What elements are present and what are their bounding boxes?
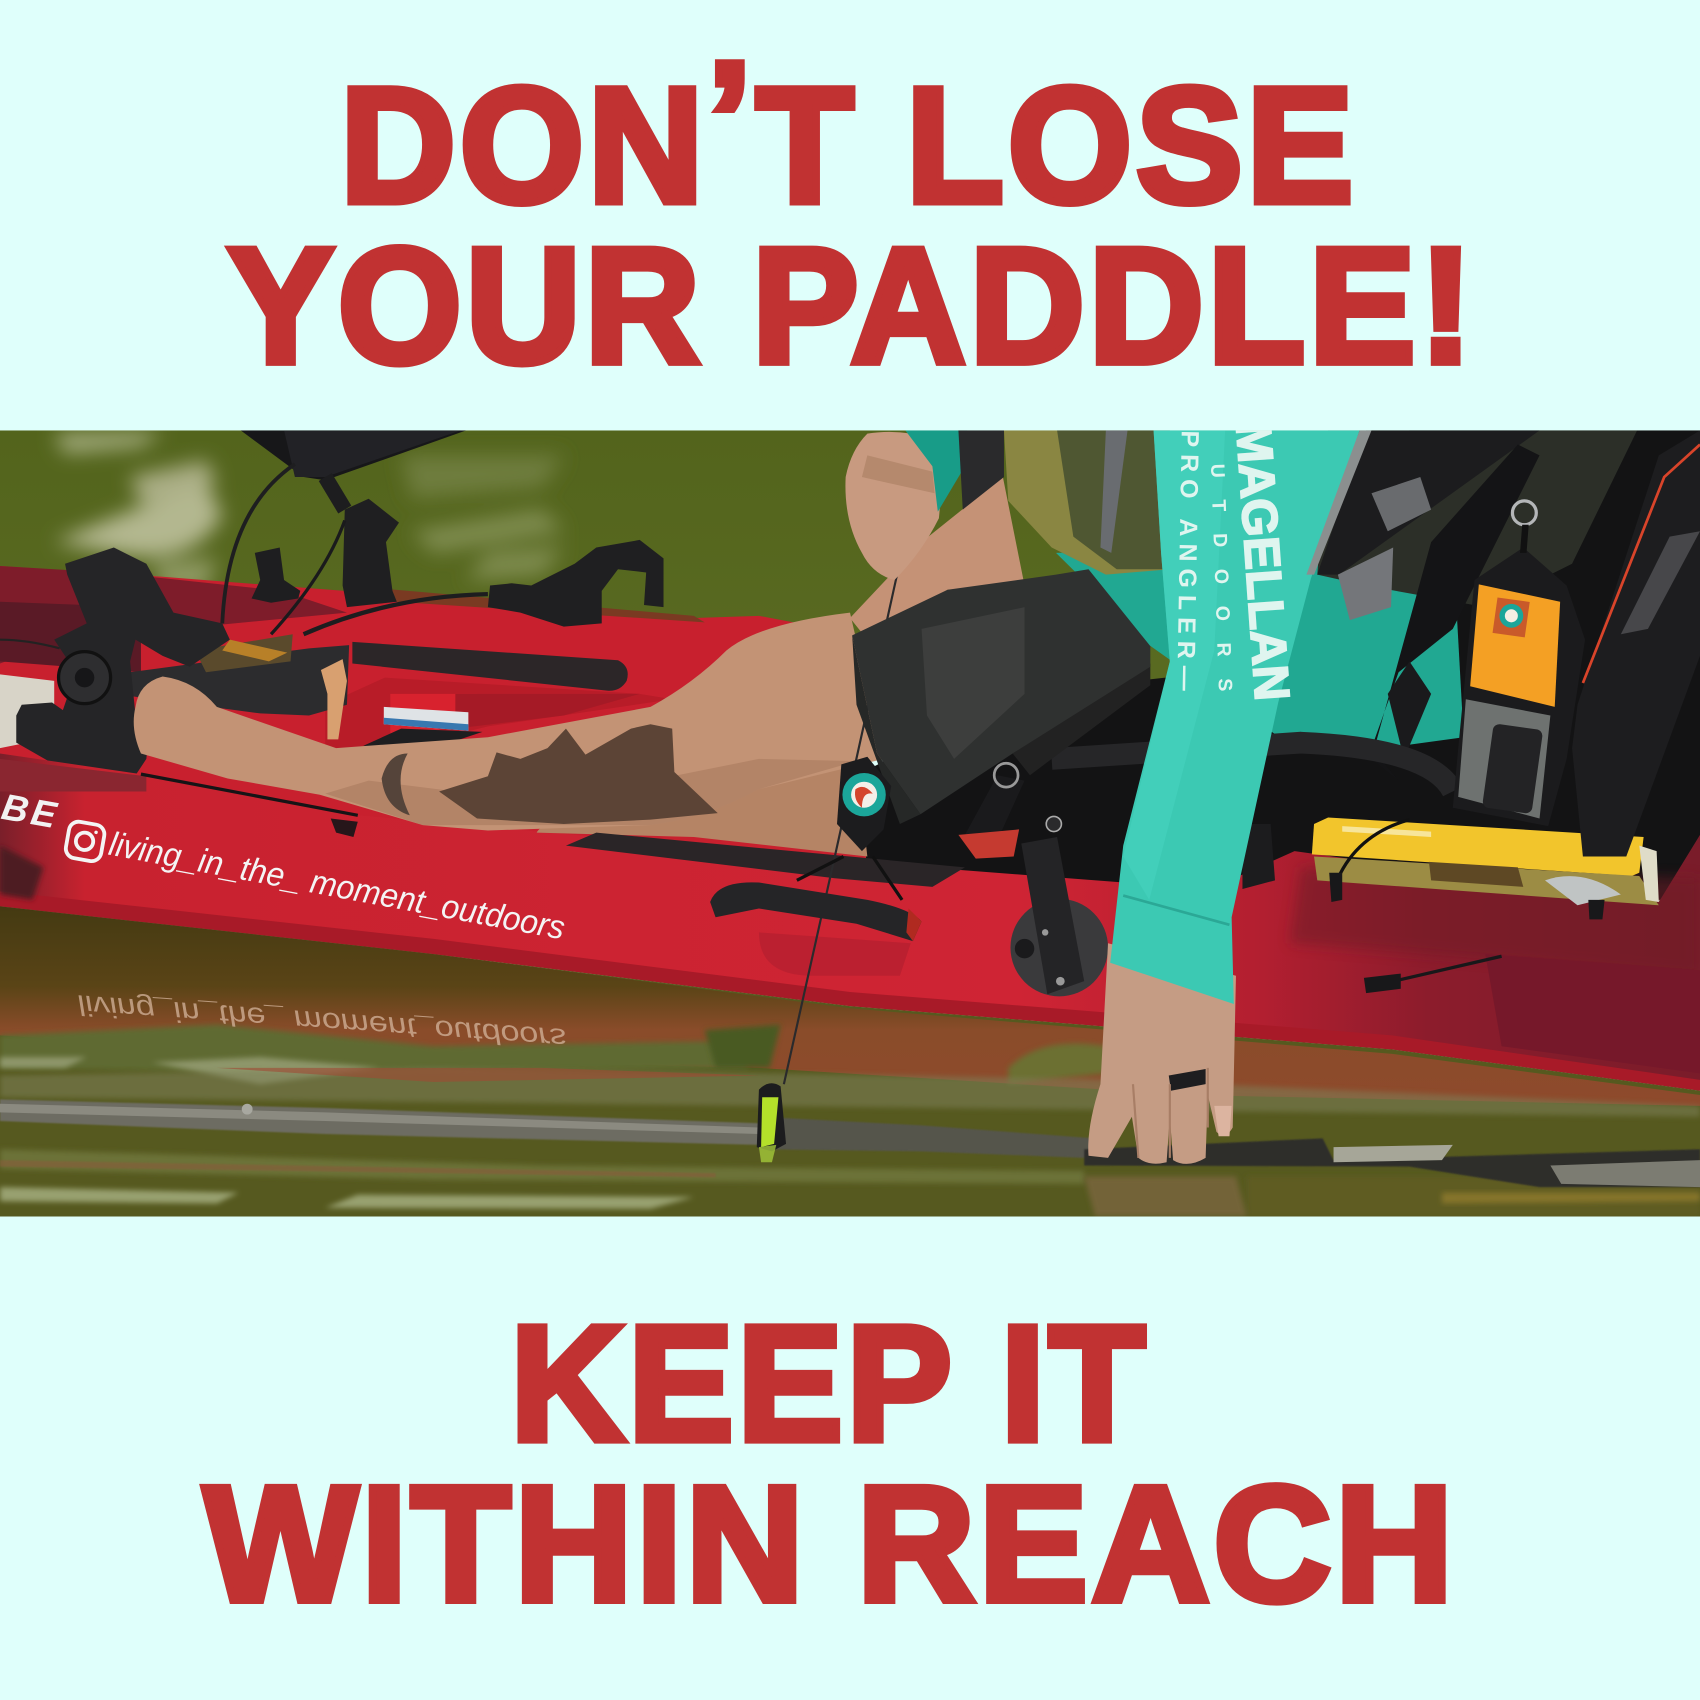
rod holder: rear right — [488, 540, 664, 627]
white gear — [384, 707, 468, 731]
right sleeve — [1110, 420, 1371, 1004]
shin knee thigh — [850, 477, 1025, 640]
heading: don't lose your paddle: YOUR PADDLE! — [228, 214, 1477, 397]
rod holder: front left — [16, 548, 230, 775]
tackle tray — [114, 645, 349, 716]
paddle clip float — [757, 1083, 786, 1162]
seat frame and straps — [958, 664, 1453, 859]
fish finder and mount — [222, 430, 488, 634]
retractable tether line — [782, 576, 898, 1084]
hull text: vibe: BE — [0, 786, 63, 836]
right hand touching paddle — [1088, 943, 1236, 1164]
yellow tackle box — [1312, 817, 1659, 919]
drink can — [1242, 824, 1275, 889]
heading: don't lose your paddle: DON — [340, 54, 717, 237]
sleeve text: outdoors: UTDOORS — [1206, 463, 1236, 692]
dark interior behind seat — [846, 430, 1700, 900]
kayak: far gunwale and cockpit — [0, 566, 867, 889]
heading: don't lose your paddle — [228, 28, 1477, 397]
water: upper — [0, 430, 1700, 680]
instagram icon — [64, 820, 106, 863]
water: lower with reflection — [0, 906, 1700, 1216]
bungee tie on hull — [1364, 956, 1502, 993]
heading: don't lose your paddle: ’ — [708, 28, 756, 211]
seat back — [1572, 430, 1700, 857]
accessory rail slot — [352, 642, 628, 691]
life vest — [1004, 430, 1170, 575]
left hand holding line — [845, 430, 1004, 580]
photo: kayak angler reaching for paddle — [0, 420, 1700, 1216]
cockpit well — [325, 678, 672, 748]
hull — [0, 754, 1700, 1091]
tan tag — [321, 659, 347, 739]
sleeve text: pro angler: PRO ANGLER— — [1171, 430, 1204, 691]
harness and backpack — [1317, 430, 1637, 781]
dry bag pouch with phone — [1453, 501, 1585, 826]
heading: keep it within reach — [204, 1292, 1457, 1635]
carry handle — [710, 882, 922, 941]
reflected hull text: living_in_the_ moment_outdoors — [76, 989, 567, 1055]
tattoo — [439, 724, 718, 824]
sleeve text: magellan: MAGELLAN — [1225, 420, 1300, 703]
torso shirt — [1056, 542, 1464, 754]
paddle shaft in water — [0, 1099, 1700, 1187]
heading: keep it within reach: WITHIN REACH — [204, 1452, 1457, 1635]
heading: keep it within reach: KEEP IT — [511, 1292, 1149, 1475]
heading: don't lose your paddle: T LOSE — [756, 54, 1357, 237]
hull text: instagram handle: living_in_the_ moment_outdoors — [106, 826, 568, 947]
round hatch with latch — [1010, 837, 1108, 996]
shorts — [852, 569, 1150, 824]
near foot and leg with tattoo — [134, 613, 884, 830]
non-slip deck pad — [566, 833, 965, 887]
retractor reel — [797, 757, 902, 900]
far foot behind leg — [536, 769, 868, 856]
